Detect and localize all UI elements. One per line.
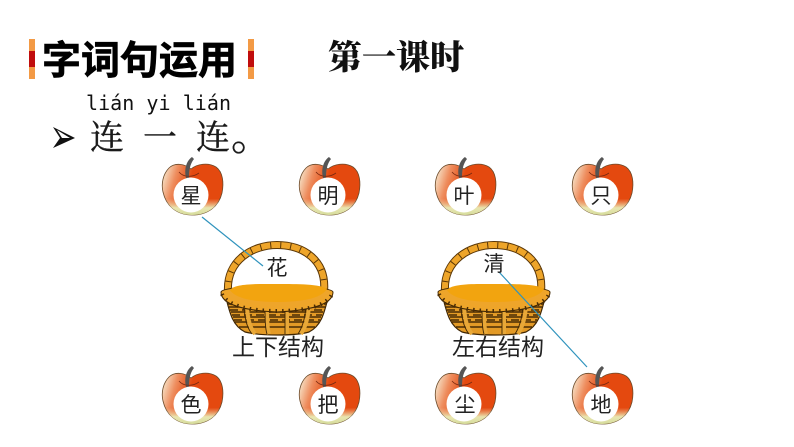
- basket: left: [221, 245, 333, 335]
- apple: 明: 明: [318, 185, 338, 208]
- instruction text: 一: [143, 120, 177, 157]
- apple: 尘: 尘: [454, 394, 476, 417]
- heading bracket: right: [248, 39, 254, 79]
- title: 字词句运用: [42, 40, 237, 83]
- lesson heading: 第一课时: [328, 39, 464, 77]
- basket: right: [438, 245, 550, 335]
- apple: 地: [572, 366, 633, 424]
- apple: 叶: 叶: [454, 185, 474, 208]
- apple: 地: 地: [590, 394, 612, 417]
- instruction text: 。: [231, 114, 273, 160]
- apple: 色: [162, 366, 223, 424]
- apple: 只: [572, 157, 633, 215]
- basket word: 花: 花: [266, 257, 288, 280]
- apple: 星: [162, 157, 223, 215]
- apple: 叶: [435, 157, 496, 215]
- pinyin: lián yi lián: [86, 91, 231, 115]
- heading bracket: left: [29, 39, 35, 79]
- arrow bullet: [53, 127, 75, 148]
- apple: 色: 色: [180, 394, 202, 417]
- connector: 星 to 花: [202, 217, 263, 266]
- apple: 把: 把: [318, 394, 338, 417]
- connector: 清 to 地: [499, 272, 587, 367]
- basket label: 左右结构: 左右结构: [452, 334, 544, 360]
- apple: 尘: [435, 366, 496, 424]
- basket label: 上下结构: 上下结构: [232, 334, 324, 360]
- apple: 明: [299, 157, 360, 215]
- basket word: 清: 清: [484, 253, 504, 276]
- apple: 把: [299, 366, 360, 424]
- instruction text: 连: [196, 120, 230, 157]
- instruction text: 连: [90, 120, 124, 157]
- apple: 只: 只: [590, 185, 612, 208]
- apple: 星: 星: [180, 185, 202, 208]
